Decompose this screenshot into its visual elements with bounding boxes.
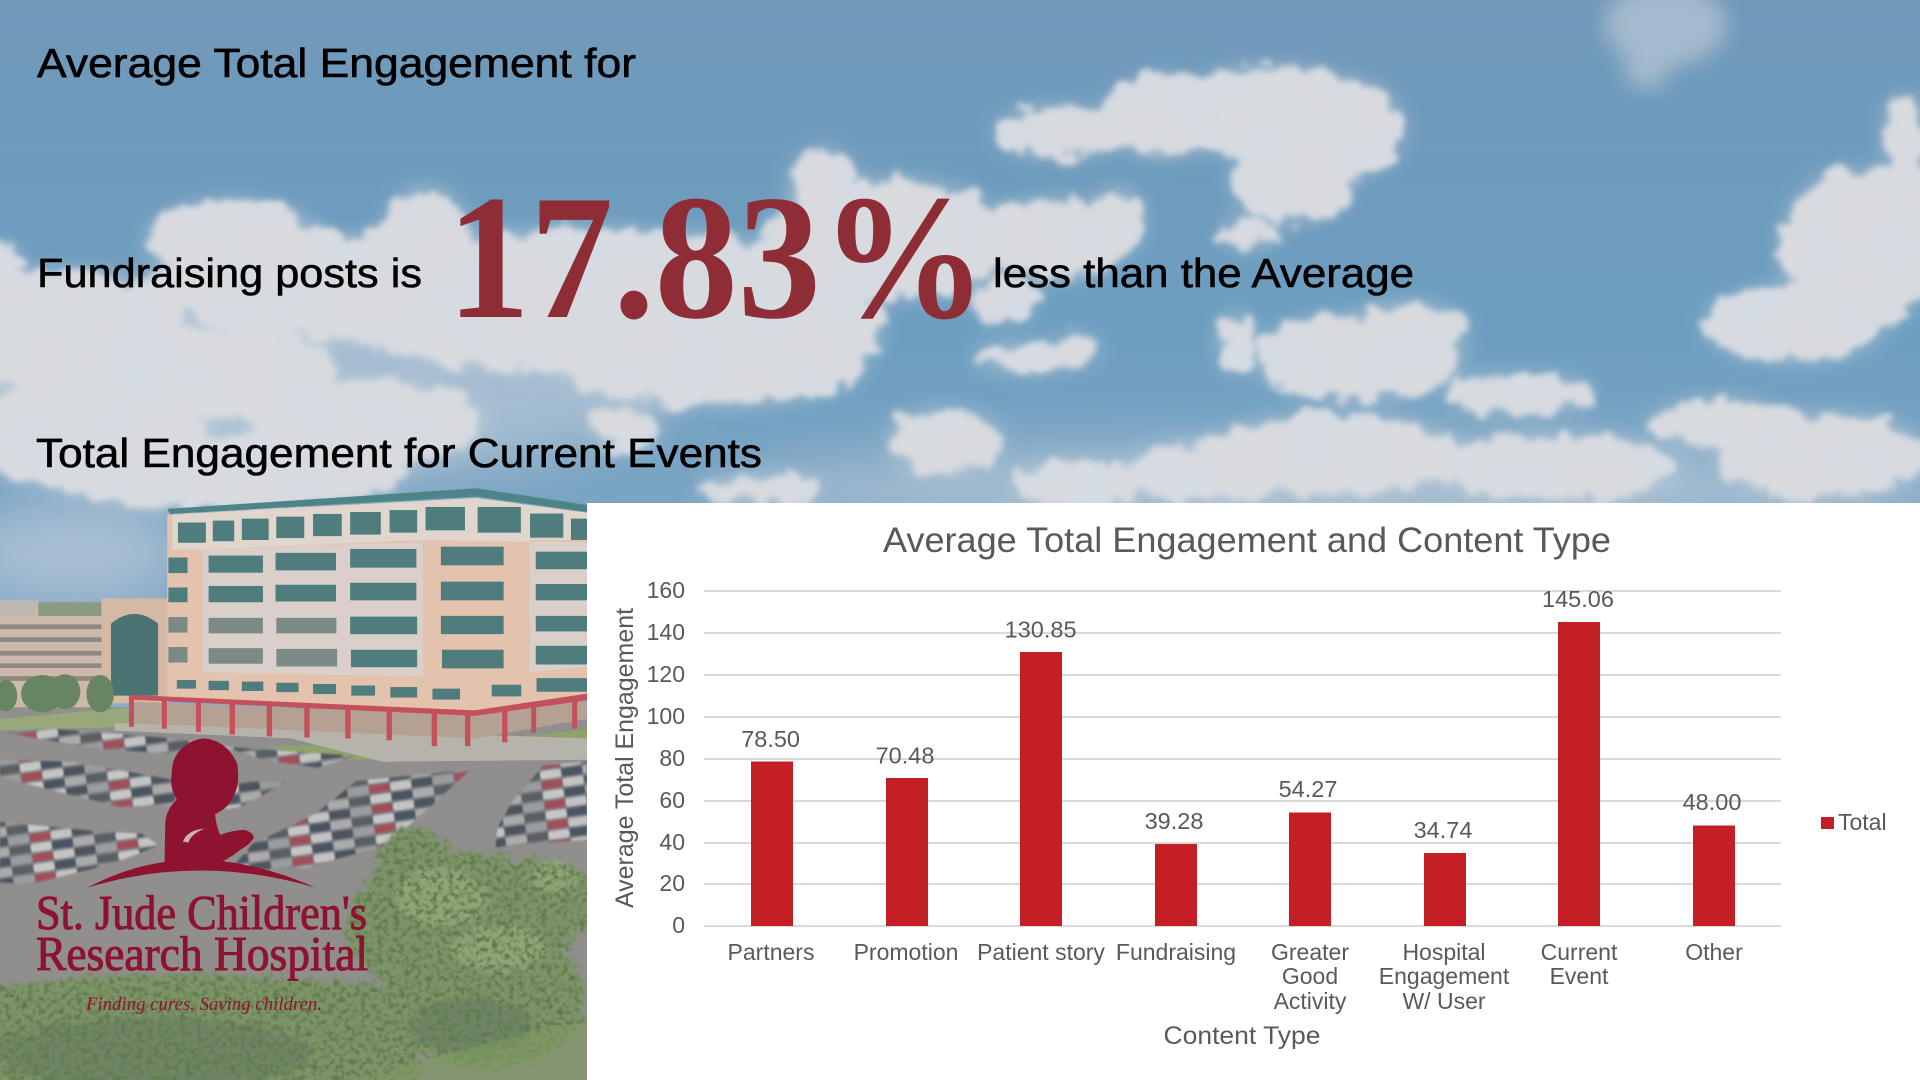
- category labels: Activity: [1274, 988, 1347, 1014]
- heading: current events: Total Engagement for Current Events: [36, 430, 762, 476]
- y axis labels: [647, 577, 685, 938]
- big number: 17.83%: [447, 158, 987, 356]
- data labels: 70.48: [876, 742, 934, 768]
- y axis labels: 60: [659, 787, 685, 813]
- data labels: 34.74: [1414, 817, 1472, 843]
- category labels: Good: [1282, 963, 1338, 989]
- chart title: Average Total Engagement and Content Type: [883, 521, 1611, 560]
- data labels: [741, 586, 1741, 843]
- category labels: Patient story: [977, 939, 1105, 965]
- trees: [0, 828, 601, 1080]
- category labels: Engagement: [1379, 963, 1510, 989]
- clouds: [0, 0, 1920, 600]
- category labels: Fundraising: [1116, 939, 1236, 965]
- data labels: 145.06: [1542, 586, 1614, 612]
- y axis labels: 140: [647, 619, 685, 645]
- category labels: Current: [1541, 939, 1618, 965]
- distant hill and garage: [0, 598, 168, 713]
- icon: child silhouette: [87, 738, 316, 888]
- y axis labels: 160: [647, 577, 685, 603]
- category labels: Partners: [728, 939, 814, 965]
- category labels: [728, 939, 1743, 1014]
- logo name: St. Jude Children's: [36, 885, 367, 940]
- y axis labels: 20: [659, 870, 685, 896]
- category labels: Promotion: [854, 939, 958, 965]
- text: fundraising posts: Fundraising posts is: [37, 250, 422, 296]
- hospital photo: [0, 488, 601, 1080]
- data labels: 78.50: [741, 726, 800, 752]
- y axis labels: 100: [647, 703, 685, 729]
- parked cars: [0, 729, 587, 884]
- panel: bar chart: [587, 503, 1920, 1080]
- heading: average total engagement: Average Total Engagement for: [37, 40, 636, 86]
- y axis labels: 40: [659, 829, 685, 855]
- category labels: Other: [1685, 939, 1743, 965]
- data labels: 54.27: [1279, 776, 1337, 802]
- category labels: W/ User: [1402, 988, 1486, 1014]
- logo: St. Jude Children's Research Hospital: Research Hospital: [36, 926, 368, 981]
- y axis title: Average Total Engagement: [611, 608, 639, 908]
- logo: St. Jude Children's Research Hospital: [36, 738, 368, 1015]
- text: less than average: less than the Average: [993, 250, 1414, 296]
- category labels: Event: [1550, 963, 1609, 989]
- y axis labels: 120: [647, 661, 685, 687]
- main building: [167, 488, 587, 711]
- data labels: 130.85: [1005, 616, 1077, 642]
- logo tagline: Finding cures. Saving children.: [85, 994, 322, 1015]
- y axis labels: 80: [659, 745, 685, 771]
- data labels: 48.00: [1683, 789, 1741, 815]
- ground: [0, 674, 587, 1080]
- red canopy: [129, 694, 587, 746]
- y axis labels: 0: [672, 912, 685, 938]
- legend: Total: [1838, 809, 1887, 835]
- data labels: 39.28: [1145, 808, 1203, 834]
- headline statement: [37, 158, 1414, 356]
- bars: [751, 622, 1735, 926]
- category labels: Greater: [1271, 939, 1349, 965]
- x axis title: Content Type: [1164, 1022, 1320, 1050]
- category labels: Hospital: [1402, 939, 1486, 965]
